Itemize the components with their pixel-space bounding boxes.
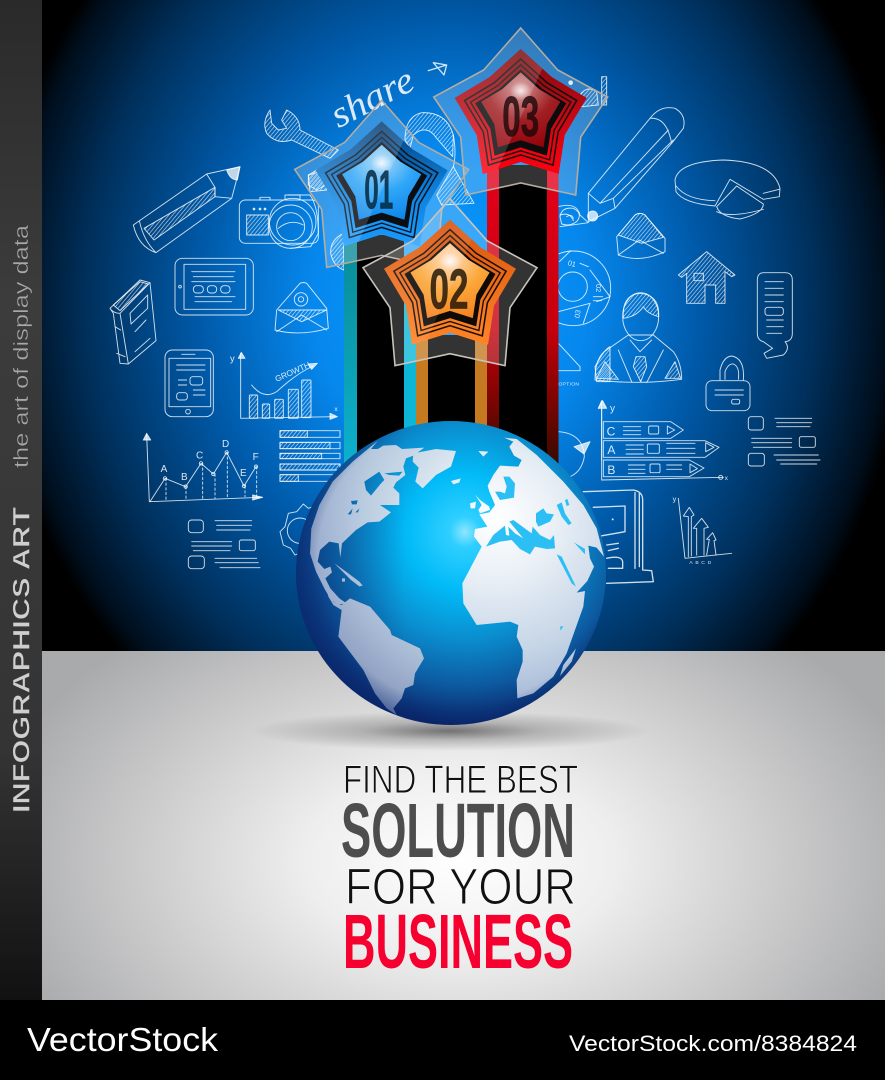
british isles [470, 494, 490, 513]
arrow bars chart: y [610, 404, 615, 415]
icon: speech bubble [757, 273, 792, 358]
icon: circle arrow [558, 432, 590, 477]
number 03: 03 [502, 85, 539, 149]
ribbon band 03 [487, 165, 558, 465]
globe shadow [250, 711, 650, 751]
arrow bars chart: C [607, 424, 616, 438]
icon: wedge of ruler [595, 347, 610, 382]
icon: envelope [617, 213, 665, 258]
star badge 01 [295, 100, 469, 267]
icon: tablet [175, 258, 253, 315]
arrow bars chart: A [607, 443, 615, 457]
growth chart: y [230, 354, 235, 364]
icon: padlock [706, 356, 750, 411]
icon: hatched circle [308, 170, 344, 270]
icon: pie chart [675, 160, 780, 219]
icon: magnifier [405, 113, 474, 205]
line: business: BUSINESS [343, 899, 573, 985]
rim shading [296, 421, 606, 725]
iceland [451, 478, 461, 484]
blue radial panel [42, 0, 885, 651]
icon: gear [280, 504, 313, 556]
text block sketch right [748, 417, 820, 466]
glass plate [434, 28, 608, 195]
icon: arrow up [598, 401, 607, 460]
doodles: right cluster [536, 108, 820, 583]
star badge 01: 01 [364, 158, 393, 220]
icon: camera [239, 195, 318, 248]
arrow bars chart: B [607, 463, 615, 477]
glass plate [363, 199, 537, 366]
icon: wrench [265, 110, 338, 190]
icon: camera fragment [269, 195, 318, 248]
icon: book [110, 280, 156, 364]
line: solution: SOLUTION [341, 788, 575, 874]
south america [327, 590, 424, 715]
cuba and caribbean [334, 563, 363, 586]
headline [341, 758, 578, 985]
ocean [296, 421, 606, 725]
ribbon band 01 [344, 235, 416, 475]
icon: phone [165, 350, 213, 417]
text block sketch [188, 520, 260, 569]
globe [296, 421, 606, 725]
arrow bars chart [598, 401, 729, 482]
doodles: centre cluster behind stars [269, 60, 610, 460]
star badge 02 [363, 199, 537, 366]
line chart A to F: D [222, 439, 229, 450]
icon: businessman [595, 293, 682, 383]
line chart A to F: B [181, 472, 188, 483]
icon: arrow chart [673, 495, 732, 566]
star badge 03 [434, 28, 608, 195]
icon: pencil [133, 167, 240, 253]
north america [310, 441, 424, 604]
share text and arrow: share [324, 60, 421, 136]
icon: arrow chart: y [673, 495, 677, 504]
bar list [280, 431, 340, 481]
growth chart [230, 352, 338, 419]
icon: donut chart: 01 [567, 258, 577, 269]
sidebar brand: INFOGRAPHICS ART [8, 507, 36, 813]
icon: small at sign [560, 77, 607, 225]
star layers [316, 122, 448, 246]
greenland [413, 449, 456, 488]
icon: house [678, 252, 735, 303]
icon: ruler [558, 343, 580, 387]
arrow bars chart: x [725, 475, 729, 482]
icon: monitor [583, 490, 653, 583]
icon: pencil right [558, 108, 684, 227]
growth chart: GROWTH [273, 360, 312, 384]
icon: donut chart: 02 [594, 284, 603, 292]
icon: donut chart [536, 251, 611, 326]
line chart A to F: A [161, 464, 168, 475]
line chart A to F: C [196, 450, 203, 461]
americas and greenland [310, 441, 461, 604]
line: for your: FOR YOUR [345, 858, 576, 915]
doodles: left cluster [110, 110, 340, 569]
line chart A to F [143, 433, 263, 502]
line chart A to F: F [253, 452, 259, 463]
sidebar tagline: the art of display data [11, 224, 33, 468]
glass plate [295, 100, 469, 267]
icon: email envelope [275, 282, 328, 333]
inland seas [486, 477, 585, 631]
madagascar [560, 648, 576, 676]
star layers [454, 49, 587, 174]
line chart A to F: E [240, 468, 247, 479]
star layers [384, 220, 516, 345]
ribbon band 02 [416, 335, 487, 460]
number 02: 02 [430, 258, 468, 322]
eurasia and africa [462, 438, 604, 698]
watermark right: VectorStock.com/8384824 [569, 1031, 857, 1056]
watermark left: VectorStock [27, 1021, 219, 1058]
grey floor panel [42, 651, 885, 1000]
icon: donut chart: 03 [572, 309, 583, 319]
left sidebar [0, 0, 42, 1000]
icon: arrow chart: ABCD [689, 560, 714, 566]
line: find the best: FIND THE BEST [343, 758, 578, 802]
svalbard [478, 451, 488, 457]
icon: ruler: OPTION [558, 381, 579, 387]
growth chart: x [334, 406, 338, 413]
